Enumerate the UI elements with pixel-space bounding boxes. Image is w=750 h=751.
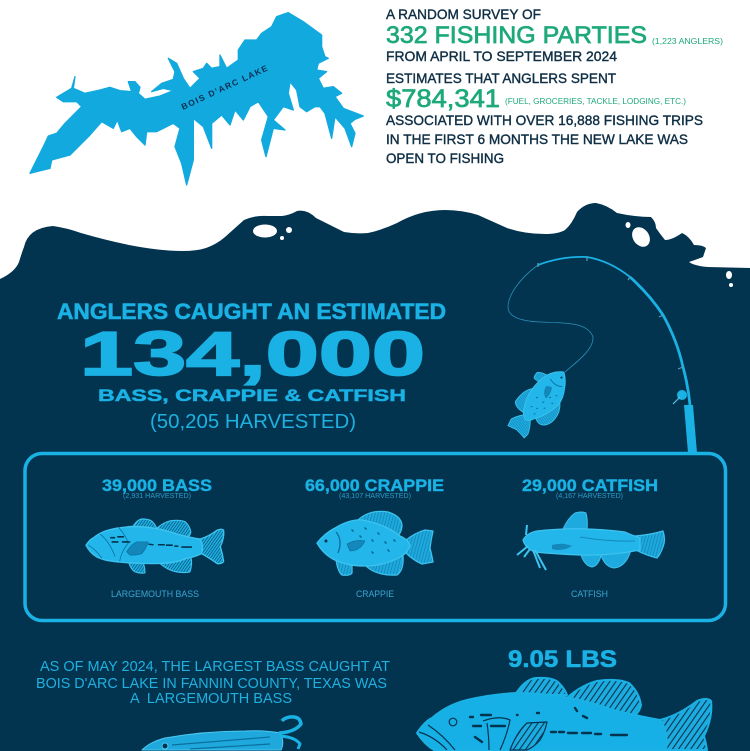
icon: lure: [142, 717, 301, 750]
survey text block: FROM APRIL TO SEPTEMBER 2024: [386, 48, 617, 64]
icon: bass: [86, 519, 224, 573]
bass column: LARGEMOUTH BASS: [111, 589, 199, 599]
rod blank: [538, 257, 630, 277]
catfish column: CATFISH: [571, 589, 608, 599]
headline: ANGLERS CAUGHT AN ESTIMATED: [57, 299, 446, 324]
fishing parties stat: 332 FISHING PARTIES: [386, 22, 647, 49]
dark water background: [0, 203, 750, 751]
crappie column: [305, 476, 444, 599]
weight stat: 9.05 LBS: [508, 646, 617, 673]
largest bass text: [36, 658, 390, 707]
crappie column: 66,000 CRAPPIE: [305, 476, 444, 495]
survey text block: ASSOCIATED WITH OVER 16,888 FISHING TRIPS: [386, 112, 703, 128]
largest bass text: BOIS D'ARC LAKE IN FANNIN COUNTY, TEXAS WAS: [36, 675, 387, 692]
survey text block: (FUEL, GROCERIES, TACKLE, LODGING, ETC.): [505, 97, 686, 106]
reel: [677, 390, 687, 400]
largest bass text: A LARGEMOUTH BASS: [130, 690, 292, 707]
survey text block: A RANDOM SURVEY OF: [386, 6, 541, 22]
lake label: BOIS D'ARC LAKE: [180, 63, 269, 112]
bass column: (2,931 HARVESTED): [123, 493, 191, 500]
survey text block: (1,223 ANGLERS): [652, 37, 723, 46]
survey text block: IN THE FIRST 6 MONTHS THE NEW LAKE WAS: [386, 131, 688, 147]
survey text block: ESTIMATES THAT ANGLERS SPENT: [386, 70, 616, 86]
icon: crappie: [317, 511, 433, 575]
bass column: [86, 476, 224, 599]
icon: catfish: [517, 512, 664, 570]
rod handle: [684, 405, 697, 453]
survey text block: OPEN TO FISHING: [386, 150, 504, 166]
catfish column: 29,000 CATFISH: [522, 476, 658, 495]
fishing line: [508, 265, 593, 372]
headline: (50,205 HARVESTED): [150, 411, 356, 433]
fishing rod with hooked crappie: [501, 257, 697, 453]
survey text block: [386, 6, 723, 166]
catfish column: [517, 476, 664, 599]
hooked fish: [501, 359, 581, 446]
crappie column: CRAPPIE: [356, 589, 394, 599]
crappie column: (43,107 HARVESTED): [339, 493, 411, 500]
headline: BASS, CRAPPIE & CATFISH: [98, 386, 406, 405]
catfish column: (4,167 HARVESTED): [556, 493, 623, 500]
bass column: 39,000 BASS: [102, 476, 212, 495]
water bubbles: [253, 222, 733, 287]
largest bass text: AS OF MAY 2024, THE LARGEST BASS CAUGHT AT: [40, 658, 390, 675]
species panel: [25, 454, 726, 620]
big number: 134,000: [80, 320, 425, 389]
icon: large bass: [417, 678, 711, 750]
lake map: [30, 13, 363, 185]
headline: [57, 299, 446, 433]
spending stat: $784,341: [386, 85, 500, 113]
